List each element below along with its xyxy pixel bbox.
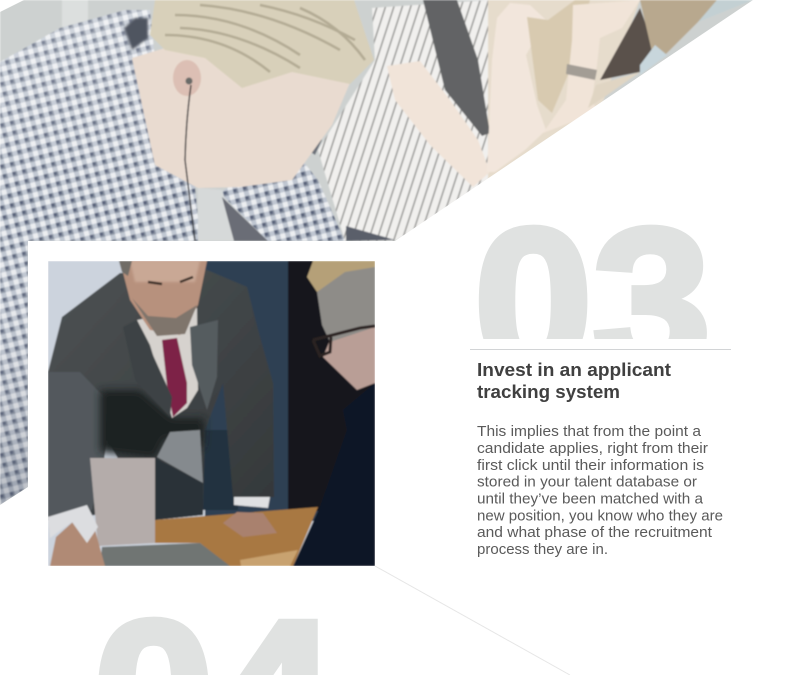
- left lapel: [123, 320, 172, 417]
- dark hair of woman: [423, 0, 490, 136]
- jacket centre shadow: [100, 390, 205, 458]
- rule under number: [470, 348, 731, 350]
- shirt shoulder: [222, 164, 345, 241]
- body text: This implies that from the point a: [477, 424, 702, 440]
- trousers: [155, 458, 203, 520]
- body text: until they’ve been matched with a: [477, 492, 704, 508]
- body text: first click until their information is: [477, 458, 704, 474]
- body text: process they are in.: [477, 542, 608, 558]
- body text: new position, you know who they are: [477, 508, 723, 524]
- hair of man: [150, 0, 374, 88]
- body text: stored in your talent database or: [477, 474, 697, 490]
- table: [155, 507, 318, 566]
- dark right wall: [288, 261, 375, 511]
- light wall: [48, 261, 315, 566]
- number: 03: 03: [474, 186, 711, 416]
- right hand: [223, 512, 277, 537]
- grey jacket flap: [157, 430, 203, 483]
- background gap under chin: [198, 188, 236, 241]
- ear and earphone: [173, 60, 201, 241]
- tie: [162, 338, 187, 417]
- panel: washed-out team photo banner: [0, 0, 800, 520]
- chair: [222, 197, 268, 241]
- second person blonde hair: [307, 261, 375, 292]
- dark wall behind lower arm: [203, 430, 238, 510]
- forehead highlight: [130, 261, 200, 282]
- right lapel: [190, 320, 218, 410]
- shirt: checked shirt of man: [0, 10, 200, 505]
- body text: [477, 424, 723, 558]
- laptop: [90, 458, 155, 546]
- eyes: [148, 277, 193, 284]
- body text: and what phase of the recruitment: [477, 525, 712, 541]
- left sleeve highlight: [48, 372, 107, 520]
- seated man's face: [323, 327, 375, 390]
- beard: [132, 298, 197, 336]
- tablet on table: [100, 543, 230, 566]
- jacket of man: [48, 270, 274, 520]
- dark jacket: [600, 8, 657, 80]
- face of man: [132, 48, 352, 188]
- white shirt: [137, 308, 198, 418]
- wristwatch: [566, 64, 597, 80]
- heading: [477, 359, 671, 402]
- collar shadow: [124, 18, 148, 50]
- forearm and clasped hand: [487, 3, 546, 172]
- blue background corner: [700, 0, 748, 20]
- tan shirt: [527, 0, 590, 113]
- heading: tracking system: [477, 381, 620, 402]
- bare upper arm: [387, 61, 490, 187]
- wooden plank: [240, 550, 298, 566]
- glasses: [313, 326, 375, 356]
- dark chest shadow: [312, 140, 322, 156]
- shirt shading: [0, 10, 158, 505]
- tan jacket: [640, 0, 717, 55]
- left cuff: [48, 505, 98, 543]
- seated man's hair: [317, 267, 375, 342]
- seated man jacket: [293, 383, 375, 566]
- body text: candidate applies, right from their: [477, 441, 708, 457]
- blouse dark lower edge: [346, 226, 395, 241]
- dark blue wall panels: [204, 261, 320, 522]
- striped blouse: [318, 0, 495, 241]
- divider line: diagonal: [375, 566, 570, 675]
- tan lap: [588, 72, 640, 108]
- face of man: [120, 261, 207, 335]
- second forearm and hand: [543, 0, 640, 133]
- hair tuft: [119, 261, 132, 276]
- left hand: [50, 520, 105, 566]
- right cuff: [234, 497, 270, 508]
- heading: Invest in an applicant: [477, 359, 671, 380]
- photo: businessman leaning over table: [48, 261, 375, 566]
- tan backdrop behind arms: [488, 0, 640, 185]
- hair streaks: [165, 5, 365, 72]
